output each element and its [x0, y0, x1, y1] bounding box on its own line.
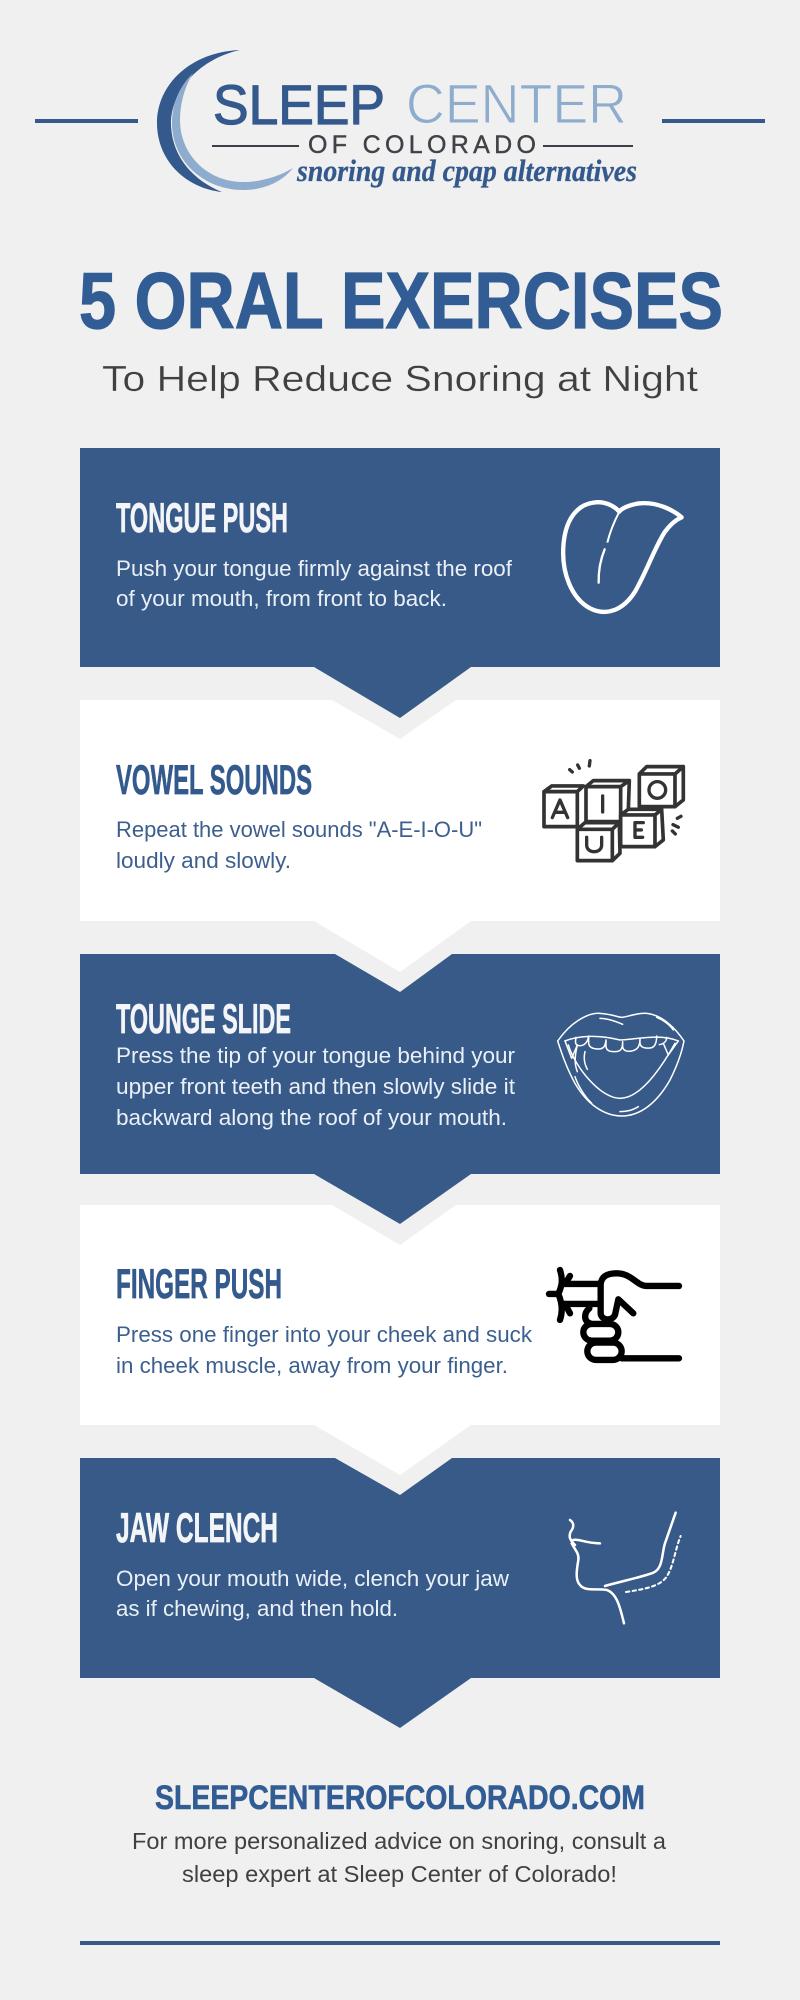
body text: [116, 1043, 515, 1130]
body text: upper front teeth and then slowly slide it: [116, 1074, 515, 1099]
body text: backward along the roof of your mouth.: [116, 1105, 507, 1130]
footer rule: [80, 1941, 720, 1945]
right divider line: [662, 119, 765, 123]
panel background: [80, 954, 720, 1224]
logo OF COLORADO: OF COLORADO: [308, 131, 536, 159]
panel: tongue push: [80, 448, 720, 718]
logo: [35, 50, 765, 192]
body text: Press the tip of your tongue behind your: [116, 1043, 515, 1068]
body text: loudly and slowly.: [116, 848, 291, 873]
logo crescent: [157, 50, 293, 192]
logo tagline: snoring and cpap alternatives: [296, 153, 637, 188]
panel background: [80, 1205, 720, 1475]
body text: [116, 817, 482, 873]
icon: open mouth: [558, 1013, 684, 1116]
heading: TONGUE PUSH: [116, 494, 288, 541]
subtitle: To Help Reduce Snoring at Night: [102, 358, 698, 399]
body text: Press one finger into your cheek and suck: [116, 1322, 533, 1347]
body text: Open your mouth wide, clench your jaw: [116, 1566, 509, 1591]
body text: of your mouth, from front to back.: [116, 586, 447, 611]
logo wordmark SLEEP: SLEEP: [213, 73, 385, 136]
heading: VOWEL SOUNDS: [116, 756, 312, 803]
footer text: sleep expert at Sleep Center of Colorado!: [182, 1861, 617, 1887]
body text: [116, 556, 513, 611]
panel: vowel sounds: [80, 700, 720, 972]
panel background: [80, 700, 720, 972]
panel background: [80, 448, 720, 718]
icon: jaw profile: [570, 1513, 681, 1623]
panel: tounge slide: [80, 954, 720, 1224]
footer website url: SLEEPCENTEROFCOLORADO.COM: [155, 1779, 645, 1817]
panel background: [80, 1458, 720, 1728]
icon: tongue: [563, 502, 682, 612]
logo wordmark CENTER: CENTER: [406, 72, 627, 135]
icon: vowel blocks: [544, 761, 683, 861]
footer text: For more personalized advice on snoring, consult a: [132, 1828, 666, 1854]
body text: as if chewing, and then hold.: [116, 1596, 398, 1621]
panel: jaw clench: [80, 1458, 720, 1728]
heading: JAW CLENCH: [116, 1504, 278, 1551]
footer text: [132, 1828, 666, 1887]
panel: finger push: [80, 1205, 720, 1475]
body text: Push your tongue firmly against the roof: [116, 556, 513, 581]
body text: in cheek muscle, away from your finger.: [116, 1353, 508, 1378]
body text: [116, 1322, 533, 1378]
heading: FINGER PUSH: [116, 1260, 282, 1307]
left divider line: [35, 119, 138, 123]
icon: finger in cheek: [549, 1270, 679, 1360]
body text: Repeat the vowel sounds "A-E-I-O-U": [116, 817, 482, 842]
body text: [116, 1566, 509, 1621]
heading: TOUNGE SLIDE: [116, 995, 291, 1042]
